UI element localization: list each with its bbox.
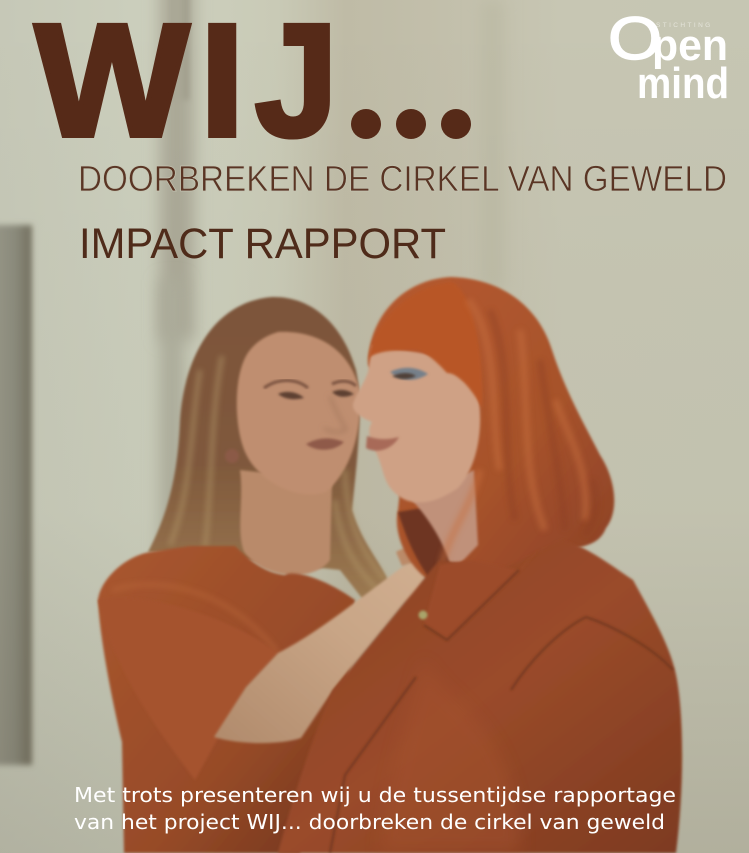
- photo: woman with long blond-brown hair: [98, 297, 424, 853]
- her hair back: [368, 277, 614, 582]
- title: [35, 0, 485, 172]
- her neck: [412, 470, 478, 572]
- her hair strands: [170, 356, 385, 590]
- her fingers: [396, 548, 420, 566]
- t-shirt folds: [112, 585, 278, 700]
- t-shirt sleeve: [98, 597, 278, 780]
- shirt seams: [330, 570, 673, 853]
- lit front panel: [380, 660, 520, 853]
- logo: Stichting Open Mind: O: [608, 5, 662, 72]
- hair shadow under jaw: [398, 505, 452, 582]
- her arm: [214, 560, 424, 743]
- logo: Stichting Open Mind: [608, 5, 729, 108]
- photo: woman with red hair: [278, 277, 682, 853]
- her bangs and waves: [368, 282, 482, 408]
- her orange t-shirt: [98, 546, 355, 853]
- her hair: [148, 297, 392, 602]
- her neck: [240, 470, 332, 575]
- intro text: van het project WIJ... doorbreken de cirkel van geweld: [74, 810, 665, 834]
- logo: Stichting Open Mind: STICHTING: [656, 22, 713, 29]
- logo: Stichting Open Mind: pen: [652, 21, 728, 70]
- report heading: IMPACT RAPPORT: [79, 220, 446, 268]
- intro text: [74, 783, 676, 834]
- her shirt: [278, 540, 682, 853]
- shirt pin: [418, 610, 428, 620]
- her face: [237, 332, 360, 494]
- shirt collar: [424, 548, 540, 640]
- logo: Stichting Open Mind: mind: [637, 59, 729, 108]
- intro text: Met trots presenteren wij u de tussentijdse rapportage: [74, 783, 676, 807]
- her face: [353, 345, 480, 503]
